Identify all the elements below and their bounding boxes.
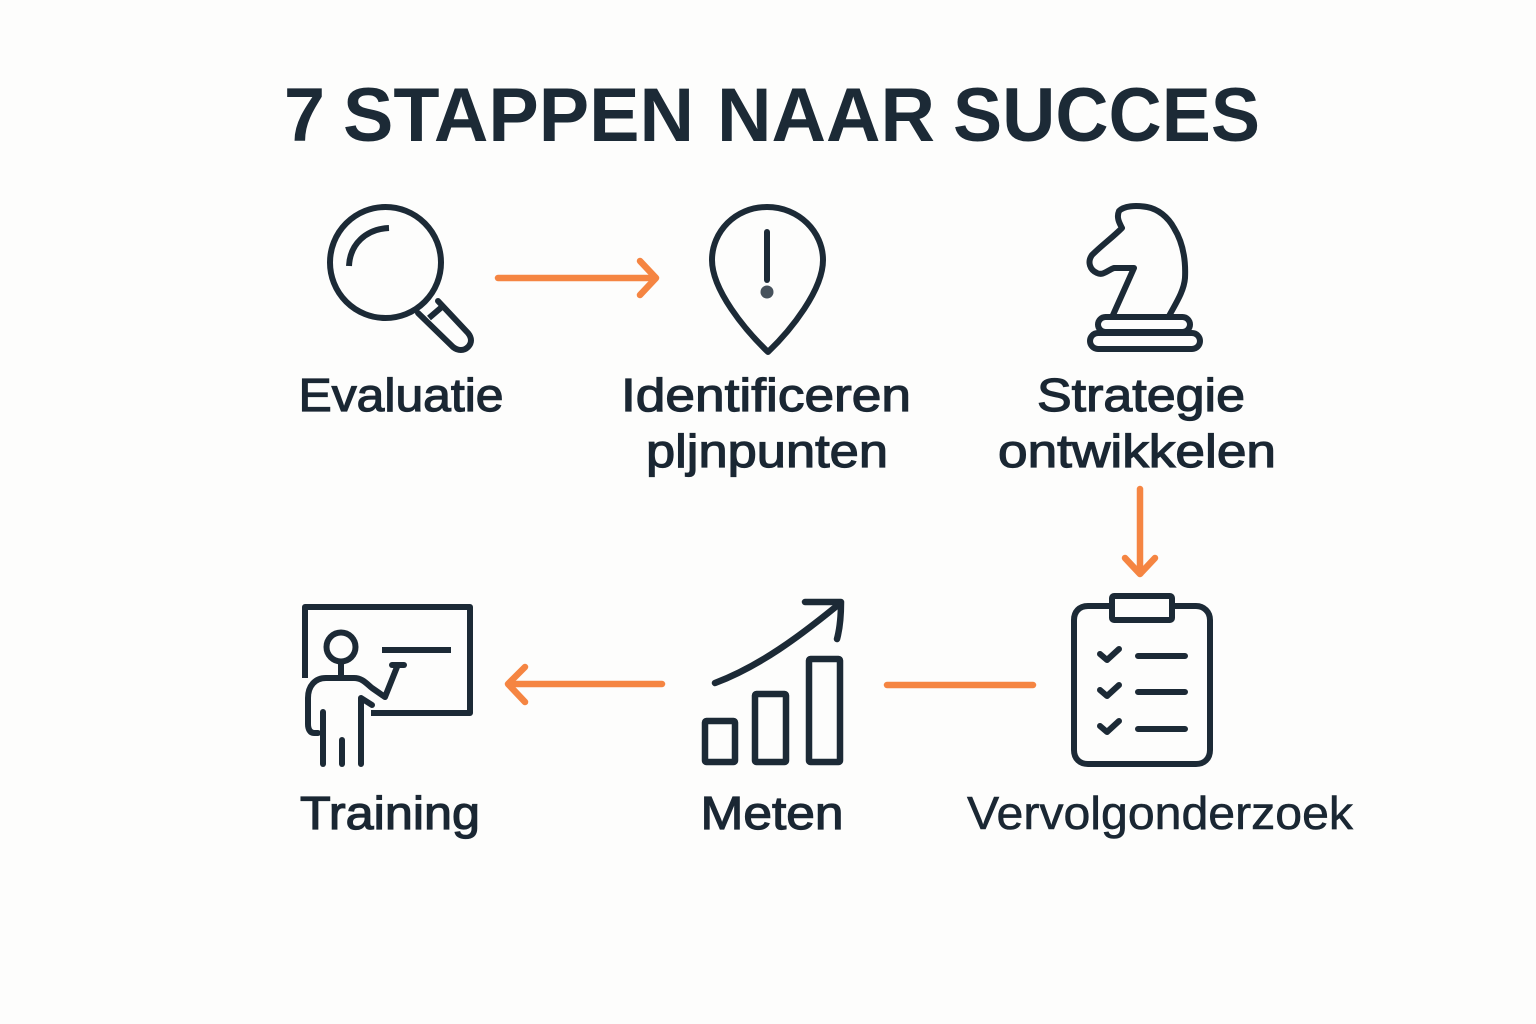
icon: trainer at whiteboard <box>305 607 470 764</box>
icon: rising bar chart <box>705 602 841 762</box>
label: Strategie ontwikkelen: ontwikkelen <box>998 425 1276 477</box>
label: Identificeren pljnpunten: pljnpunten <box>646 425 888 477</box>
label: Evaluatie: Evaluatie <box>298 369 504 421</box>
label: Identificeren pljnpunten <box>621 369 911 477</box>
label: Training: Training <box>300 787 480 839</box>
icon: pin with exclamation mark <box>712 207 823 352</box>
arrow: evaluatie to identificeren <box>498 261 656 295</box>
icon: clipboard checklist <box>1074 596 1210 764</box>
label: Strategie ontwikkelen: Strategie <box>1037 369 1245 421</box>
icon: chess knight <box>1090 206 1200 349</box>
label: Strategie ontwikkelen <box>998 369 1276 477</box>
title: NAAR <box>717 73 935 158</box>
title: SUCCES <box>953 73 1260 158</box>
title: STAPPEN <box>343 73 694 158</box>
label: Meten: Meten <box>700 787 844 839</box>
label: Identificeren pljnpunten: Identificeren <box>621 369 911 421</box>
arrow: meten to training <box>508 667 662 702</box>
title <box>284 73 1260 158</box>
title: 7 <box>284 73 325 158</box>
connector: vervolgonderzoek to meten <box>887 682 1033 688</box>
icon: magnifying glass <box>330 207 471 350</box>
arrow: strategie to vervolgonderzoek <box>1125 489 1155 574</box>
label: Vervolgonderzoek: Vervolgonderzoek <box>967 787 1354 839</box>
